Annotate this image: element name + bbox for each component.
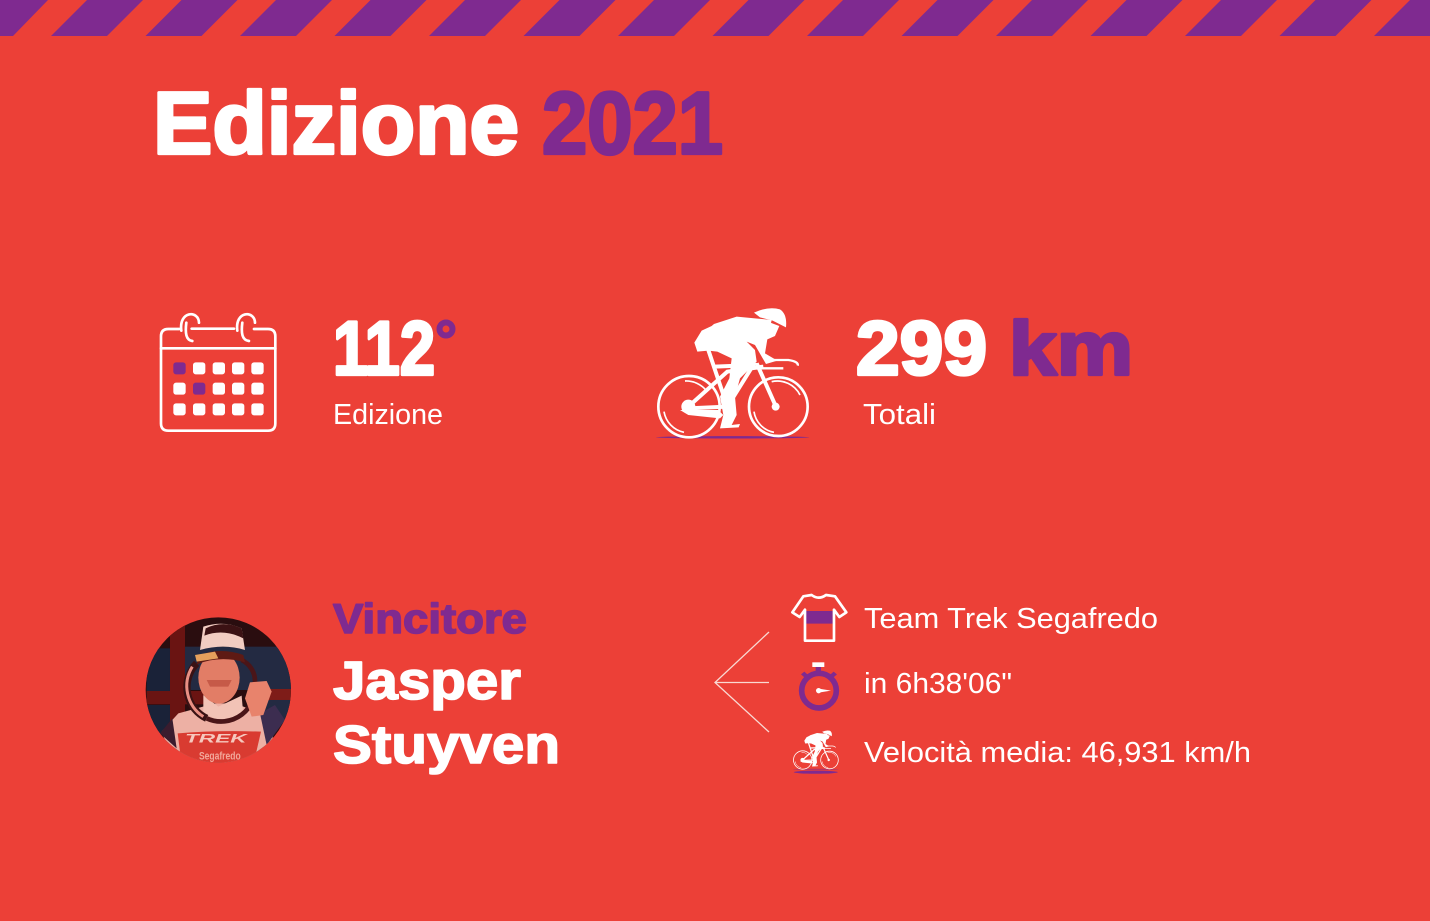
icon: jersey	[792, 595, 846, 641]
winner photo: Segafredo	[199, 751, 241, 763]
winner name: Stuyven	[333, 715, 560, 775]
winner photo	[145, 615, 292, 765]
arrow connector	[715, 632, 769, 732]
winner name: Jasper	[333, 651, 521, 711]
stat: edition number	[333, 306, 452, 431]
stat: total distance: 299	[856, 306, 987, 392]
stat: total distance: km	[1009, 306, 1133, 392]
title: 2021	[542, 74, 723, 172]
icon: calendar	[161, 314, 275, 431]
winner name: Vincitore	[333, 595, 527, 642]
text: team: Team Trek Segafredo	[864, 603, 1158, 635]
icon: cyclist	[656, 308, 809, 438]
stat: total distance: Totali	[863, 399, 936, 431]
text: time: in 6h38'06"	[864, 668, 1012, 700]
title: Edizione	[153, 74, 519, 172]
top stripes	[0, 0, 1430, 36]
stat: edition number: Edizione	[333, 399, 443, 431]
icon: small cyclist	[793, 730, 839, 774]
text: average speed: Velocità media: 46,931 km/h	[864, 737, 1251, 769]
winner photo: TREK	[185, 731, 249, 745]
stat: total distance	[856, 306, 1133, 431]
icon: stopwatch	[801, 662, 837, 708]
title	[153, 74, 723, 172]
winner name	[333, 595, 560, 775]
stat: edition number: 112	[333, 306, 435, 392]
